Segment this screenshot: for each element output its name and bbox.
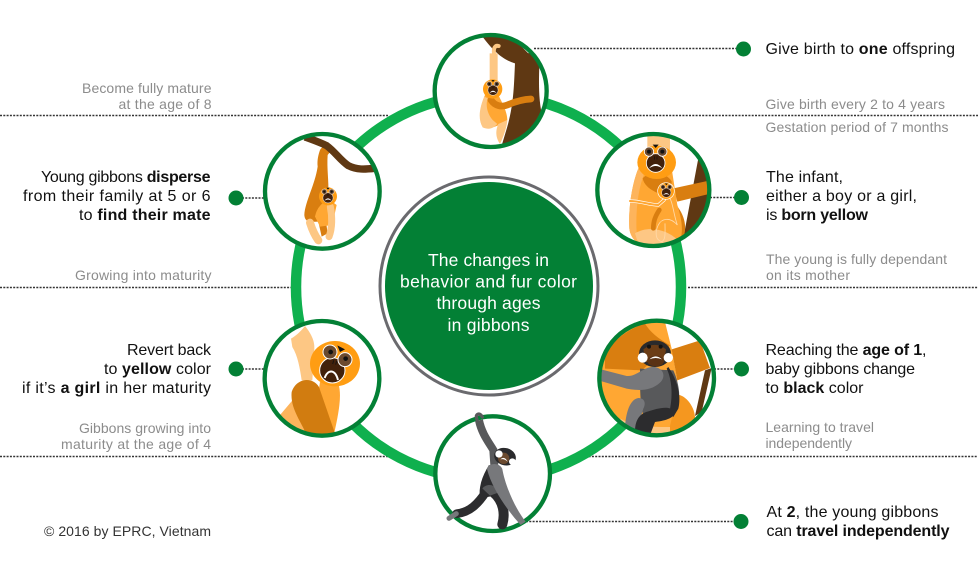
right note: learning to travel: Learning to travel — [766, 419, 874, 435]
right text: infant born yellow: either a boy or a girl, — [766, 188, 917, 205]
connector: maturity medallion — [228, 362, 264, 376]
right text: one offspring: Give birth to one offspring — [766, 41, 955, 58]
left text: revert to yellow — [22, 342, 212, 397]
connector: dispersal medallion — [228, 190, 264, 206]
left note: growing into maturity: Growing into maturity — [75, 267, 212, 283]
right note: birth interval and gestation: Give birth every 2 to 4 years — [766, 96, 945, 112]
left text: revert to yellow: to yellow color — [104, 361, 212, 378]
right text: age of 1 turns black: to black color — [766, 380, 864, 397]
dotted divider: growing at age 4 — [0, 456, 978, 458]
right text: travel independently at 2 — [766, 504, 950, 540]
center title: through ages — [436, 293, 541, 313]
right note: dependent young: The young is fully dependant — [766, 251, 947, 267]
dotted divider: growing into maturity — [0, 286, 978, 288]
right note: birth interval and gestation: Gestation period of 7 months — [766, 119, 948, 135]
right text: age of 1 turns black: baby gibbons change — [766, 361, 915, 378]
left text: disperse to find mate — [23, 169, 211, 224]
center title — [400, 250, 577, 335]
medallion: yellow adult female close-up — [265, 321, 379, 437]
right text: travel independently at 2: can travel independently — [766, 523, 950, 540]
center title: behavior and fur color — [400, 272, 577, 292]
medallion: black gibbon swinging — [435, 414, 550, 531]
right text: infant born yellow: is born yellow — [766, 207, 869, 224]
left note: maturity at age 4 — [61, 420, 211, 452]
right note: dependent young — [766, 251, 947, 283]
right text: travel independently at 2: At 2, the young gibbons — [766, 504, 938, 521]
center title: The changes in — [428, 250, 549, 270]
left note: fully mature: at the age of 8 — [118, 96, 212, 112]
life cycle ring — [296, 94, 681, 480]
connector: top medallion — [534, 42, 751, 56]
right note: dependent young: on its mother — [766, 267, 850, 283]
right text: infant born yellow — [766, 169, 917, 224]
medallion: young gibbon turning black — [597, 318, 716, 438]
left text: disperse to find mate: Young gibbons disperse — [41, 169, 211, 186]
left note: maturity at age 4: maturity at the age of 4 — [61, 436, 211, 452]
left text: revert to yellow: Revert back — [127, 342, 212, 359]
right note: birth interval and gestation — [766, 96, 948, 135]
medallion: gibbon mother hanging by tree — [435, 33, 553, 153]
medallion: young gibbon hanging from branch — [265, 134, 380, 249]
connector: independent travel medallion — [526, 514, 748, 529]
left text: disperse to find mate: to find their mate — [79, 207, 211, 224]
center title: in gibbons — [448, 315, 530, 335]
copyright: © 2016 by EPRC, Vietnam — [44, 523, 211, 539]
left note: fully mature — [82, 80, 212, 112]
right note: learning to travel — [766, 419, 874, 451]
right text: infant born yellow: The infant, — [766, 169, 843, 186]
connector: black fur medallion — [714, 362, 749, 376]
left text: revert to yellow: if it’s a girl in her maturity — [22, 380, 211, 397]
right text: age of 1 turns black: Reaching the age of 1, — [766, 342, 926, 359]
connector: infant medallion — [710, 190, 749, 205]
center circle — [380, 177, 598, 395]
right text: age of 1 turns black — [766, 342, 926, 397]
dotted divider: mature stage — [0, 114, 978, 116]
right note: learning to travel: independently — [766, 435, 852, 451]
left note: maturity at age 4: Gibbons growing into — [79, 420, 211, 436]
left text: disperse to find mate: from their family at 5 or 6 — [23, 188, 211, 205]
left note: fully mature: Become fully mature — [82, 80, 212, 96]
medallion: mother with yellow infant — [597, 134, 723, 249]
